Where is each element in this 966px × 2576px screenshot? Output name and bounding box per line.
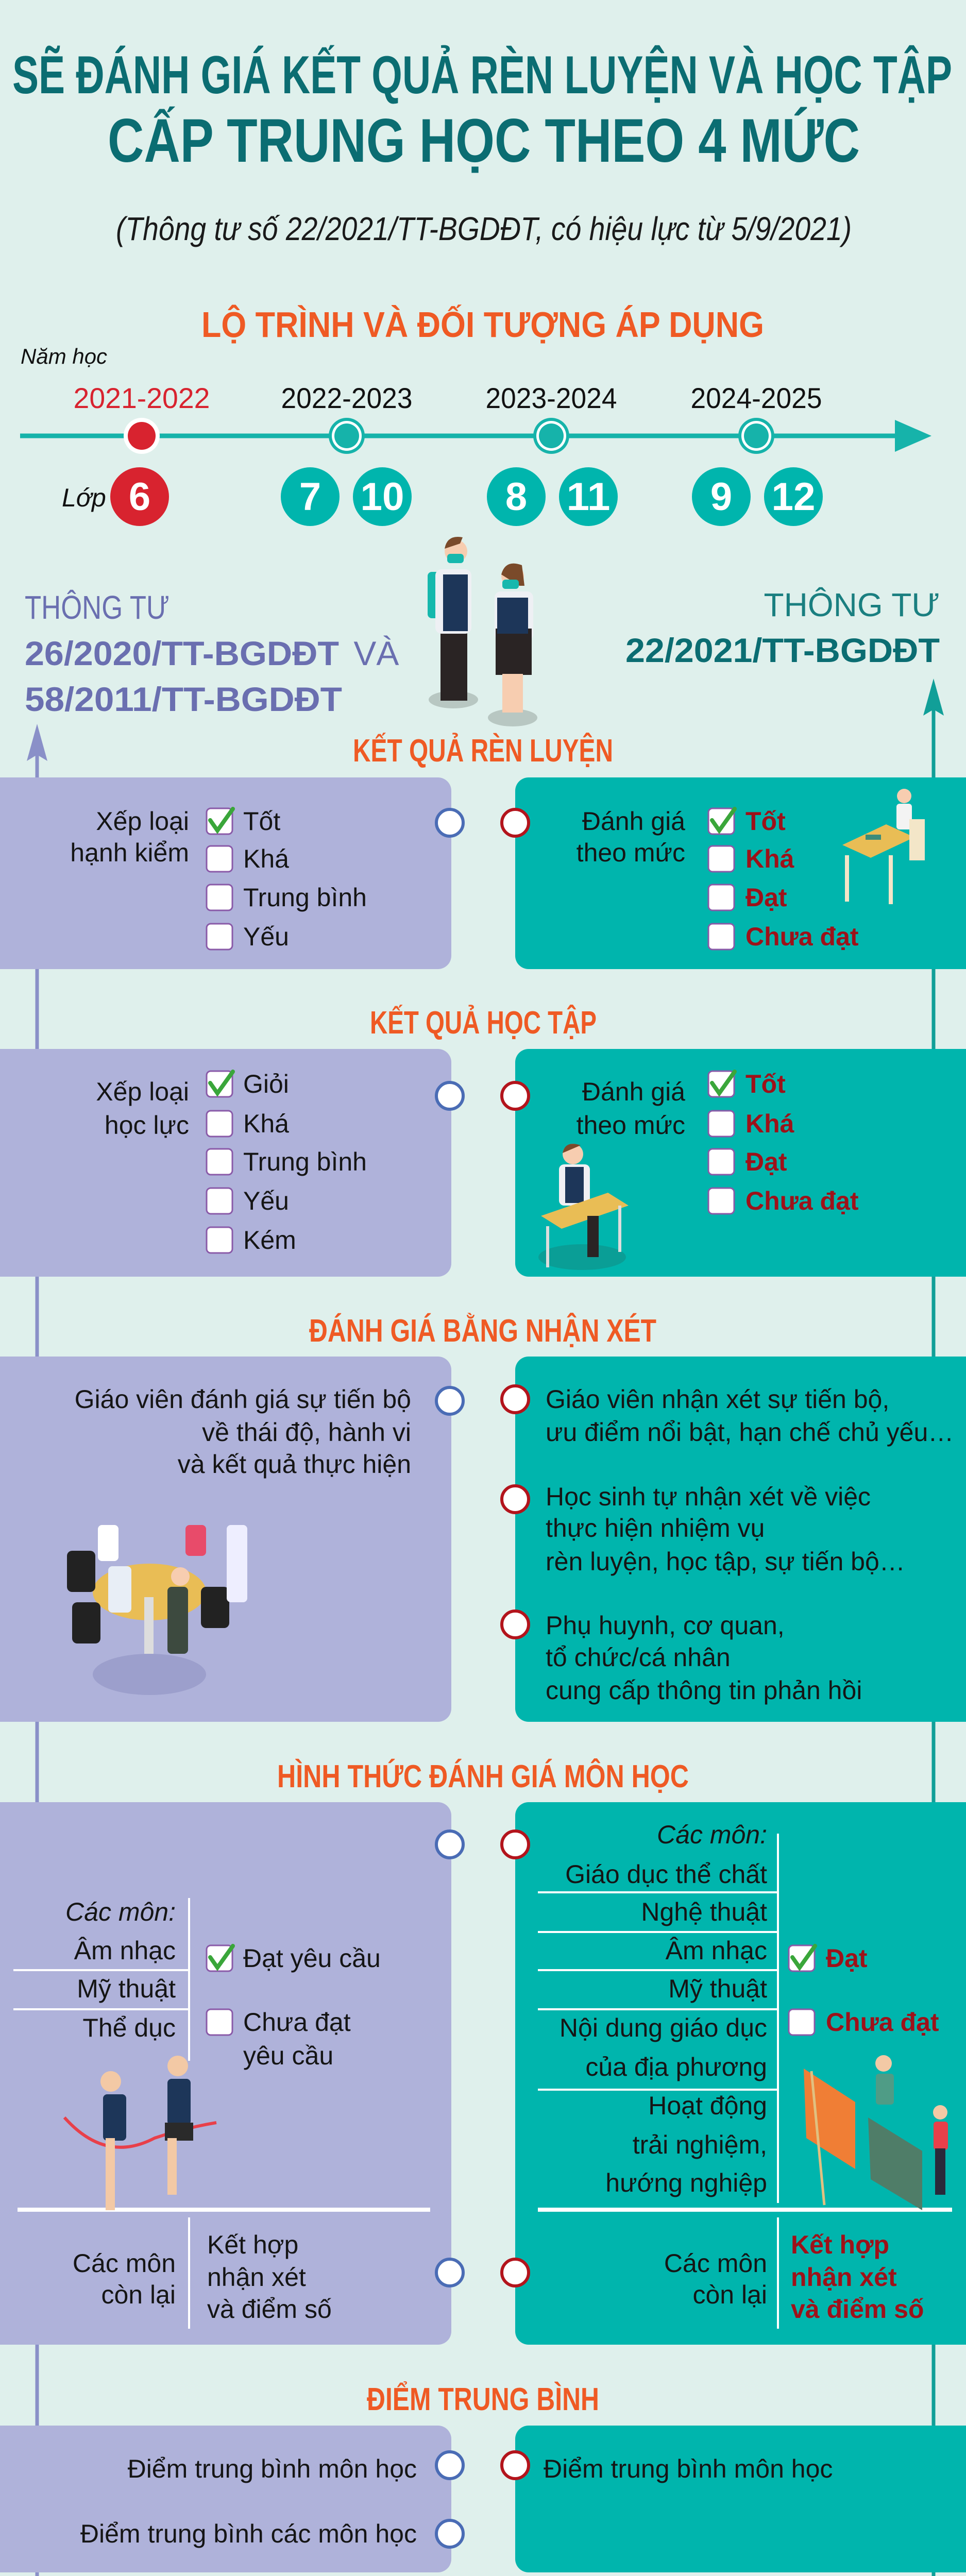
panel: học tập old: Xếp loại	[96, 1077, 189, 1106]
illustration: two students	[428, 537, 537, 726]
panel: môn học new: Hoạt động	[648, 2091, 767, 2120]
panel: học tập new: Đánh giá	[582, 1077, 685, 1106]
panel: nhận xét new: Giáo viên nhận xét sự tiến bộ,	[546, 1385, 889, 1414]
panel: học tập old: Giỏi	[243, 1070, 289, 1098]
panel: môn học new: trải nghiệm,	[633, 2130, 767, 2159]
grade circles: 7	[299, 475, 321, 519]
panel: nhận xét old: Giáo viên đánh giá sự tiến bộ	[75, 1385, 411, 1414]
panel: rèn luyện new	[502, 777, 966, 969]
left circular law label: THÔNG TƯ	[25, 589, 170, 626]
panel: nhận xét new: thực hiện nhiệm vụ	[546, 1514, 765, 1543]
right circular law label: 22/2021/TT-BGDĐT	[625, 631, 940, 669]
heading: điểm trung bình: ĐIỂM TRUNG BÌNH	[367, 2382, 599, 2417]
panel: môn học new: còn lại	[692, 2280, 767, 2309]
right circular law label: THÔNG TƯ	[764, 586, 940, 623]
panel: nhận xét new: Học sinh tự nhận xét về việc	[546, 1482, 871, 1511]
panel: môn học old: yêu cầu	[243, 2041, 333, 2070]
panel: rèn luyện new: Chưa đạt	[745, 922, 859, 951]
left circular law label	[25, 589, 399, 718]
panel: môn học old: Chưa đạt	[243, 2008, 351, 2037]
panel: học tập old: Trung bình	[243, 1147, 367, 1176]
panel: nhận xét old: và kết quả thực hiện	[178, 1450, 411, 1479]
icon: runners	[64, 2056, 216, 2210]
panel: điểm TB old: Điểm trung bình các môn học	[80, 2519, 417, 2548]
panel: môn học old	[0, 1802, 463, 2345]
panel: môn học new: Âm nhạc	[666, 1936, 767, 1965]
panel: rèn luyện new: Đạt	[745, 883, 787, 912]
panel: học tập new	[502, 1049, 966, 1277]
panel: môn học new: nhận xét	[791, 2263, 897, 2292]
panel: môn học new: của địa phương	[585, 2053, 767, 2081]
icon: student at desk	[538, 1144, 629, 1270]
grade circles: 9	[710, 475, 732, 519]
panel: nhận xét old	[0, 1357, 463, 1722]
grade circles: 6	[129, 475, 150, 519]
panel: điểm TB new	[502, 2426, 966, 2572]
panel: môn học new: Các môn:	[657, 1820, 767, 1849]
panel: nhận xét new: rèn luyện, học tập, sự tiến bộ…	[546, 1547, 905, 1576]
right circular law label	[625, 586, 940, 669]
panel: môn học old: nhận xét	[207, 2263, 306, 2292]
panel: rèn luyện old: Tốt	[243, 807, 280, 836]
panel: rèn luyện new: Đánh giá	[582, 807, 685, 836]
panel: nhận xét new	[502, 1357, 966, 1722]
panel: nhận xét new: cung cấp thông tin phản hồi	[546, 1676, 862, 1705]
arrow: right timeline axis	[923, 679, 944, 2576]
panel: rèn luyện old: Yếu	[243, 922, 289, 951]
panel: môn học new: Nội dung giáo dục	[560, 2013, 767, 2042]
panel: môn học new: Mỹ thuật	[668, 1974, 767, 2003]
panel: nhận xét new: tổ chức/cá nhân	[546, 1643, 731, 1672]
panel: môn học old: Các môn	[73, 2249, 176, 2278]
panel: học tập old	[0, 1049, 463, 1277]
panel: rèn luyện old: Trung bình	[243, 883, 367, 912]
panel: học tập new: Chưa đạt	[745, 1187, 859, 1215]
panel: rèn luyện old	[0, 777, 463, 969]
left circular law label: 58/2011/TT-BGDĐT	[25, 680, 342, 718]
grade circles	[62, 467, 823, 526]
heading: kết quả học tập: KẾT QUẢ HỌC TẬP	[370, 1005, 597, 1041]
panel: môn học new: hướng nghiệp	[605, 2168, 767, 2197]
panel: môn học old: và điểm số	[207, 2295, 332, 2324]
grade circles: 11	[567, 475, 610, 519]
icon: meeting table	[67, 1525, 247, 1695]
icon: painters	[804, 2055, 948, 2210]
panel: môn học old: Âm nhạc	[74, 1936, 176, 1965]
panel: rèn luyện old: hạnh kiểm	[70, 838, 189, 867]
title	[12, 45, 952, 175]
panel: học tập new: Tốt	[745, 1070, 786, 1098]
panel: nhận xét old: về thái độ, hành vi	[202, 1418, 411, 1447]
heading: đánh giá bằng nhận xét: ĐÁNH GIÁ BẰNG NHẬN XÉT	[309, 1313, 656, 1349]
heading: lộ trình: LỘ TRÌNH VÀ ĐỐI TƯỢNG ÁP DỤNG	[201, 304, 764, 345]
panel: học tập new: Khá	[745, 1109, 794, 1138]
panel: điểm TB old: Điểm trung bình môn học	[128, 2454, 417, 2483]
panel: rèn luyện old: Khá	[243, 844, 289, 873]
panel: học tập old: học lực	[105, 1111, 189, 1140]
panel: học tập new: theo mức	[577, 1111, 685, 1140]
panel: môn học new: Kết hợp	[791, 2230, 889, 2259]
panel: học tập old: Yếu	[243, 1187, 289, 1215]
arrow: left timeline axis	[27, 724, 47, 2576]
grade circles: 8	[505, 475, 527, 519]
panel: môn học old: Đạt yêu cầu	[243, 1944, 381, 1973]
panel: môn học new: Nghệ thuật	[641, 1897, 767, 1926]
timeline: 2022-2023	[281, 382, 412, 414]
left circular law label: 26/2020/TT-BGDĐT VÀ	[25, 634, 399, 672]
heading: hình thức đánh giá môn học: HÌNH THỨC ĐÁNH GIÁ MÔN HỌC	[277, 1759, 689, 1794]
panel: môn học new	[502, 1802, 966, 2345]
panel: rèn luyện new: theo mức	[577, 838, 685, 867]
timeline: 2021-2022	[73, 382, 210, 414]
panel: môn học old: Thể dục	[82, 2013, 176, 2042]
panel: điểm TB new: Điểm trung bình môn học	[544, 2454, 833, 2483]
grade circles: 10	[361, 475, 404, 519]
grade circles: 12	[772, 475, 815, 519]
panel: học tập old: Kém	[243, 1226, 296, 1255]
timeline: 2024-2025	[690, 382, 822, 414]
panel: nhận xét new: Phụ huynh, cơ quan,	[546, 1611, 785, 1640]
panel: môn học new: Các môn	[664, 2249, 767, 2278]
panel: học tập new: Đạt	[745, 1147, 787, 1176]
timeline: 2023-2024	[485, 382, 617, 414]
panel: môn học new: Chưa đạt	[826, 2008, 939, 2037]
panel: điểm TB old	[0, 2426, 463, 2572]
panel: môn học new: Đạt	[826, 1944, 868, 1973]
grade circles: Lớp	[62, 483, 106, 512]
icon: girl at desk	[842, 789, 925, 904]
heading: kết quả rèn luyện: KẾT QUẢ RÈN LUYỆN	[353, 733, 613, 769]
panel: môn học old: Mỹ thuật	[77, 1974, 176, 2003]
timeline: Năm học	[21, 344, 107, 368]
panel: môn học old: Kết hợp	[207, 2230, 298, 2259]
panel: môn học old: Các môn:	[65, 1897, 176, 1926]
subtitle: (Thông tư số 22/2021/TT-BGDĐT, có hiệu lực từ 5/9/2021)	[116, 210, 852, 247]
panel: rèn luyện new: Tốt	[745, 807, 786, 836]
panel: môn học new: Giáo dục thể chất	[565, 1860, 767, 1889]
timeline	[20, 344, 931, 454]
panel: học tập old: Khá	[243, 1109, 289, 1138]
panel: môn học new: và điểm số	[791, 2295, 924, 2324]
panel: rèn luyện old: Xếp loại	[96, 807, 189, 836]
panel: nhận xét new: ưu điểm nổi bật, hạn chế chủ yếu…	[546, 1418, 954, 1447]
panel: môn học old: còn lại	[101, 2280, 176, 2309]
panel: rèn luyện new: Khá	[745, 844, 794, 873]
